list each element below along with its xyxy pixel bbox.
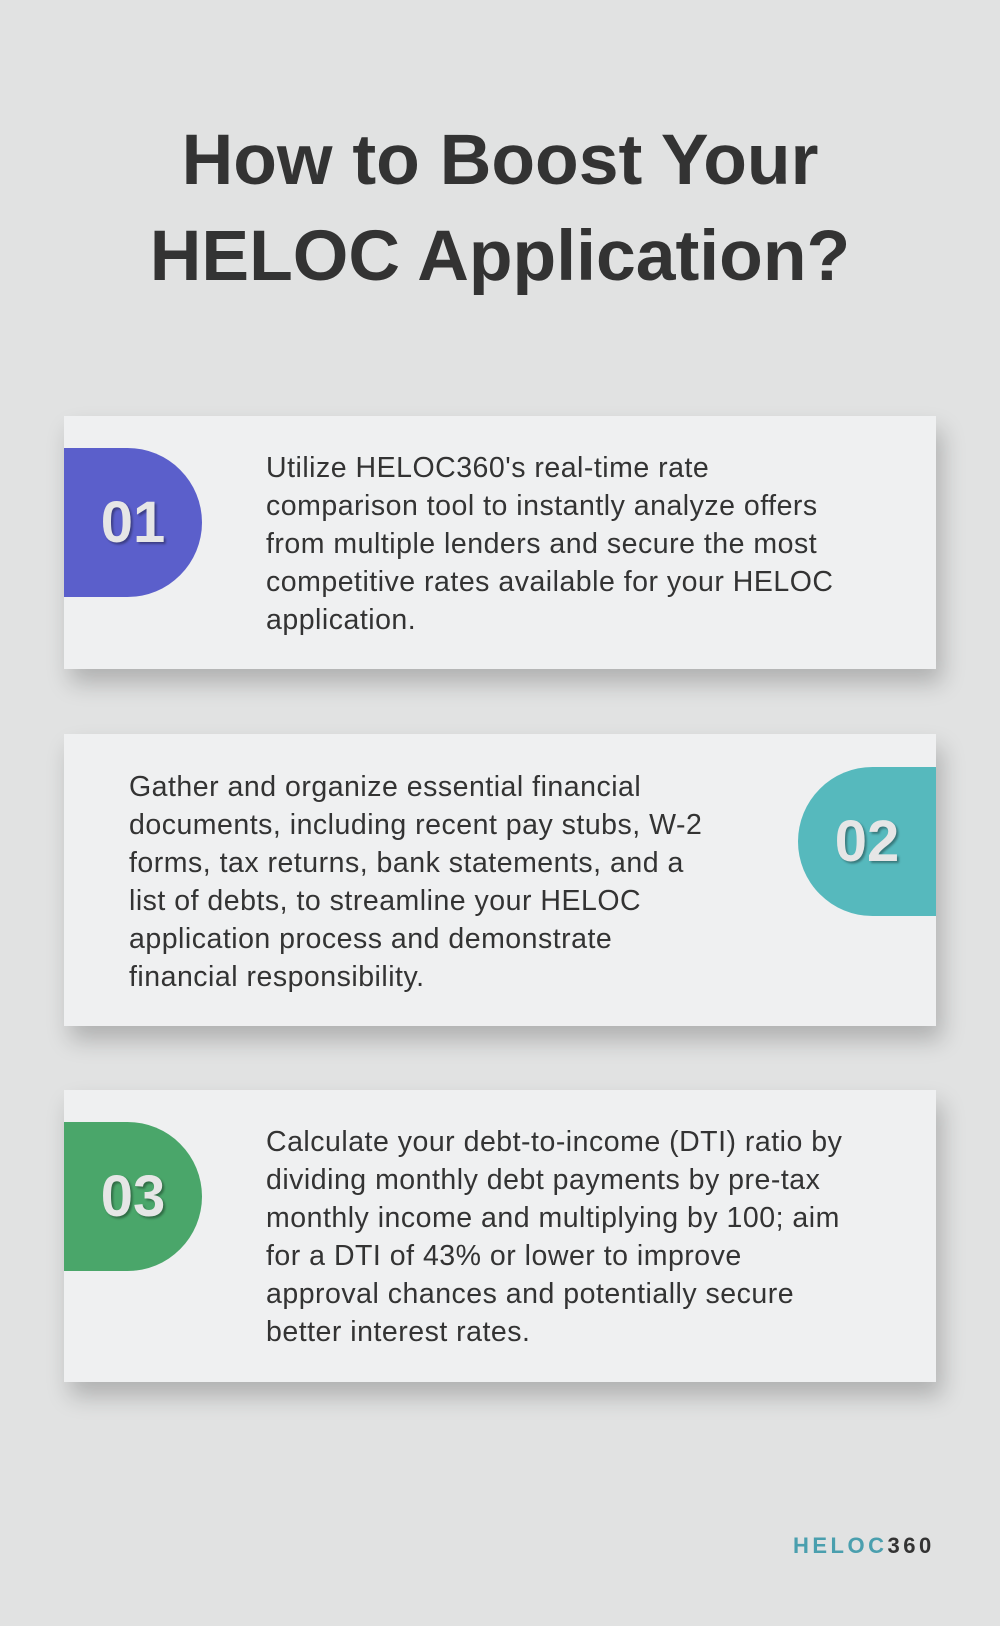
badge 02 <box>798 767 936 916</box>
text step 3 <box>266 1126 842 1348</box>
logo: HELOC360 <box>793 1533 935 1558</box>
text step 2: forms, tax returns, bank statements, and a <box>129 847 684 879</box>
text step 1 <box>266 452 833 636</box>
title: How to Boost Your <box>182 120 818 200</box>
text step 1: from multiple lenders and secure the most <box>266 528 817 560</box>
text step 2: documents, including recent pay stubs, W-2 <box>129 809 702 841</box>
badge 03 <box>64 1122 202 1271</box>
text step 1: comparison tool to instantly analyze offers <box>266 490 818 522</box>
badge 01 <box>64 448 202 597</box>
text step 2: Gather and organize essential financial <box>129 771 641 803</box>
text step 1: competitive rates available for your HELOC <box>266 566 833 598</box>
badge 02: 02 <box>835 809 899 874</box>
text step 3: better interest rates. <box>266 1316 530 1348</box>
badge 03: 03 <box>101 1164 165 1229</box>
panel: step 3 <box>64 1090 936 1382</box>
text step 3: dividing monthly debt payments by pre-tax <box>266 1164 820 1196</box>
badge 01: 01 <box>101 490 165 555</box>
text step 3: Calculate your debt-to-income (DTI) ratio by <box>266 1126 842 1158</box>
text step 2 <box>129 771 702 993</box>
title <box>150 120 850 296</box>
text step 1: Utilize HELOC360's real-time rate <box>266 452 709 484</box>
text step 3: for a DTI of 43% or lower to improve <box>266 1240 742 1272</box>
text step 3: monthly income and multiplying by 100; aim <box>266 1202 840 1234</box>
panel: step 2 <box>64 734 936 1026</box>
text step 2: application process and demonstrate <box>129 923 612 955</box>
text step 2: financial responsibility. <box>129 961 425 993</box>
title: HELOC Application? <box>150 216 850 296</box>
text step 2: list of debts, to streamline your HELOC <box>129 885 641 917</box>
text step 1: application. <box>266 604 416 636</box>
panel: step 1 <box>64 416 936 669</box>
text step 3: approval chances and potentially secure <box>266 1278 794 1310</box>
